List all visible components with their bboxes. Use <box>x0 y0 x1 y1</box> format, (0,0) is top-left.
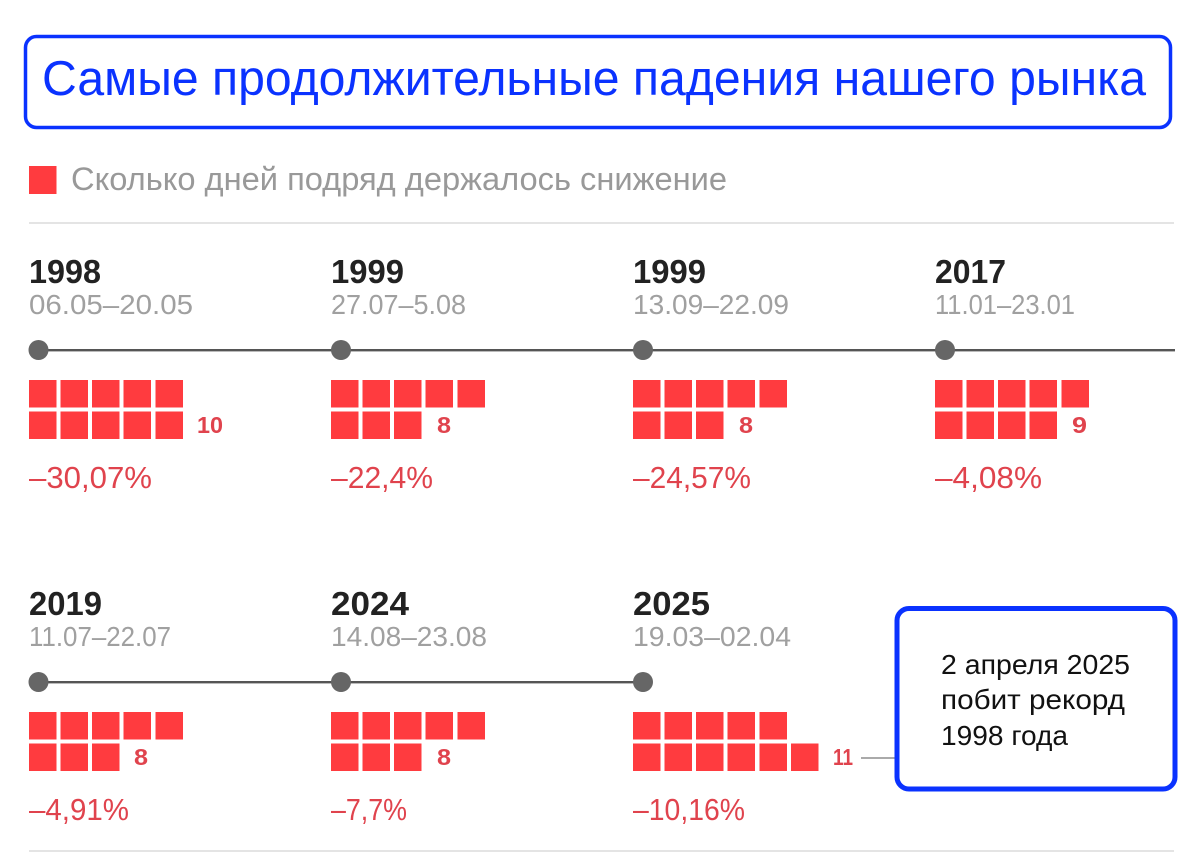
entry: 2025: 2025 <box>633 585 710 622</box>
callout: 1998 года <box>941 720 1068 751</box>
callout: побит рекорд <box>941 684 1125 715</box>
entry: 1998 <box>29 253 223 495</box>
timeline row 2 <box>28 672 653 692</box>
callout <box>897 608 1175 789</box>
entry: 2017: 11.01–23.01 <box>935 289 1075 320</box>
entry: 2024: 14.08–23.08 <box>331 621 487 652</box>
entry: 2019 <box>29 585 183 827</box>
entry: 1998: 06.05–20.05 <box>29 289 193 320</box>
entry: 1998: 1998 <box>29 253 101 290</box>
entry: 1999 July: –22,4% <box>331 460 433 495</box>
entry: 2025 <box>633 585 853 827</box>
entry: 2019: 8 <box>134 744 148 770</box>
entry: 2025: 11 <box>833 744 853 770</box>
entry: 2017: 2017 <box>935 253 1006 290</box>
entry: 2024: 8 <box>437 744 451 770</box>
title: Самые продолжительные падения нашего рынка <box>42 52 1147 106</box>
entry: 1999 September: 1999 <box>633 253 706 290</box>
entry: 1999 July <box>331 253 485 495</box>
entry: 1999 July: 1999 <box>331 253 404 290</box>
entry: 1999 July: 27.07–5.08 <box>331 289 466 320</box>
entry: 1999 September: 8 <box>739 412 753 438</box>
entry: 1999 September: –24,57% <box>633 460 751 495</box>
entry: 1998: 10 <box>197 412 223 438</box>
entry: 2024: –7,7% <box>331 792 407 827</box>
entry: 2025: –10,16% <box>633 792 745 827</box>
entry: 2019: 2019 <box>29 585 102 622</box>
legend: Сколько дней подряд держалось снижение <box>71 161 727 197</box>
entry: 2017: 9 <box>1072 412 1087 438</box>
entry: 1998: –30,07% <box>29 460 152 495</box>
entry: 2019: 11.07–22.07 <box>29 621 171 652</box>
entry: 2024: 2024 <box>331 585 410 622</box>
entry: 1999 July: 8 <box>437 412 451 438</box>
entry: 2017: –4,08% <box>935 460 1042 495</box>
entry: 2025: 19.03–02.04 <box>633 621 791 652</box>
title <box>26 36 1170 128</box>
entry: 1999 September <box>633 253 789 495</box>
entry: 2019: –4,91% <box>29 792 129 827</box>
entry: 1999 September: 13.09–22.09 <box>633 289 789 320</box>
entry: 2017 <box>935 253 1089 495</box>
callout connector <box>861 757 896 759</box>
callout: 2 апреля 2025 <box>941 649 1130 680</box>
timeline row 1 <box>28 340 1175 360</box>
entry: 2024 <box>331 585 487 827</box>
